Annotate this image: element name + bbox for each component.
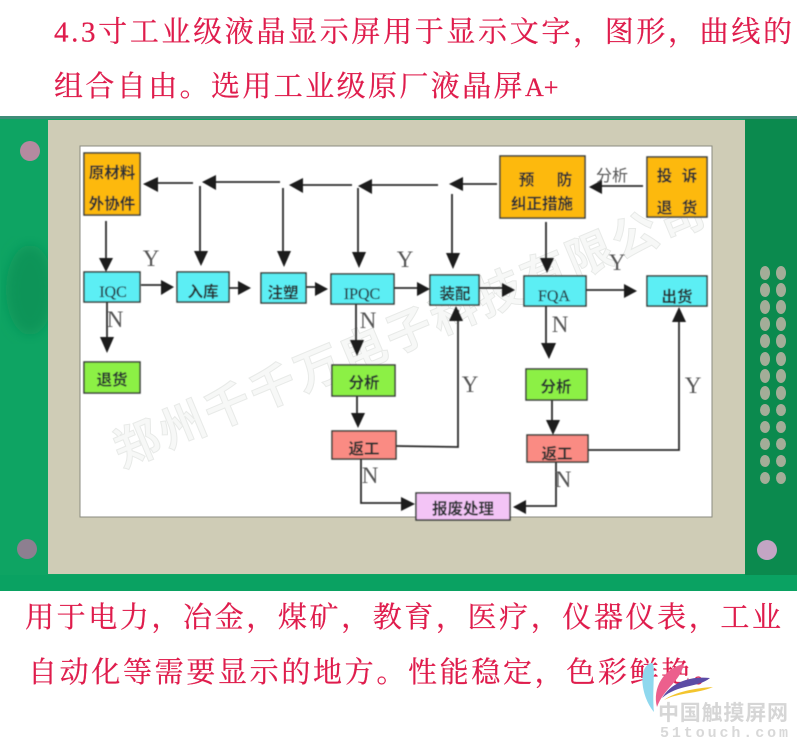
box: injection molding: [261, 273, 306, 303]
flow labels: Y: [397, 247, 414, 272]
box: rework right: [527, 435, 588, 464]
watermark: 郑州千千万电子科技有限公司: [102, 175, 713, 481]
box: complaints and returns: 货: [682, 196, 697, 218]
box: rework left: 返工: [348, 437, 380, 459]
box: rework left: [332, 431, 396, 459]
connector lines: [106, 182, 679, 506]
box: analysis right: 分析: [540, 375, 572, 397]
title: product description: [54, 16, 792, 103]
flow labels: Y: [462, 372, 479, 397]
body text: applications: [25, 601, 781, 689]
box: FQA: FQA: [538, 288, 570, 305]
box: scrap handling: 报废处理: [432, 497, 494, 519]
circuit board: [0, 116, 797, 591]
box: IQC: IQC: [99, 284, 127, 301]
body text: applications: 自动化等需要显示的地方。性能稳定，色彩鲜艳。: [28, 656, 722, 689]
box: raw materials: [84, 153, 140, 215]
flow labels: N: [555, 467, 572, 492]
box: shipment: [647, 276, 707, 307]
box: injection molding: 注塑: [267, 281, 299, 303]
flow labels: Y: [685, 373, 702, 398]
box: complaints and returns: [647, 157, 707, 218]
pin header: [760, 266, 786, 484]
flow labels: [107, 162, 702, 492]
box: complaints and returns: 诉: [682, 164, 697, 186]
box: prevention and correction: 防: [557, 168, 572, 190]
box: raw materials: 外协件: [89, 192, 135, 214]
box: return goods: 退货: [96, 368, 128, 390]
title: product description: 4.3寸工业级液晶显示屏用于显示文字，图形，曲线的: [54, 16, 792, 48]
box: IPQC: IPQC: [344, 286, 380, 303]
box: prevention and correction: 纠正措施: [511, 192, 573, 214]
flow labels: 分析: [596, 162, 628, 186]
display bezel: [48, 120, 745, 574]
panel: LCD module photo: [0, 116, 797, 591]
flow labels: N: [552, 312, 569, 337]
arrowheads: [99, 175, 686, 514]
flow labels: N: [107, 307, 124, 332]
box: assembly: [430, 275, 479, 305]
title: product description: 组合自由。选用工业级原厂液晶屏A+: [54, 70, 558, 103]
box: analysis right: [526, 369, 587, 400]
flow labels: N: [362, 463, 379, 488]
box: FQA: [524, 276, 586, 306]
flowchart: [84, 153, 707, 520]
box: IPQC: [331, 274, 394, 304]
box: return goods: [84, 362, 140, 393]
box: complaints and returns: 投: [657, 164, 673, 186]
box: warehousing: 入库: [187, 280, 219, 302]
mounting holes: [17, 141, 777, 560]
box: analysis left: 分析: [348, 371, 380, 393]
flow labels: N: [360, 308, 377, 333]
box: complaints and returns: 退: [657, 196, 673, 218]
box: assembly: 装配: [439, 282, 471, 304]
box: IQC: [84, 272, 140, 302]
box: prevention and correction: 预: [519, 168, 535, 190]
icon: feathers: [642, 663, 713, 712]
box: raw materials: 原材料: [89, 161, 136, 183]
box: rework right: 返工: [541, 442, 573, 464]
logo: 51touch: 51touch.com: [660, 725, 788, 742]
logo: 51touch: [642, 663, 788, 742]
box: warehousing: [177, 272, 229, 302]
body text: applications: 用于电力，冶金，煤矿，教育，医疗，仪器仪表，工业: [25, 601, 781, 634]
box: scrap handling: [416, 493, 510, 520]
logo: 51touch: 中国触摸屏网: [658, 697, 788, 727]
flow labels: Y: [609, 250, 626, 275]
flow labels: Y: [143, 246, 160, 271]
display screen: [80, 146, 712, 517]
box: prevention and correction: [500, 156, 585, 218]
box: analysis left: [332, 365, 395, 396]
box: shipment: 出货: [661, 285, 693, 307]
